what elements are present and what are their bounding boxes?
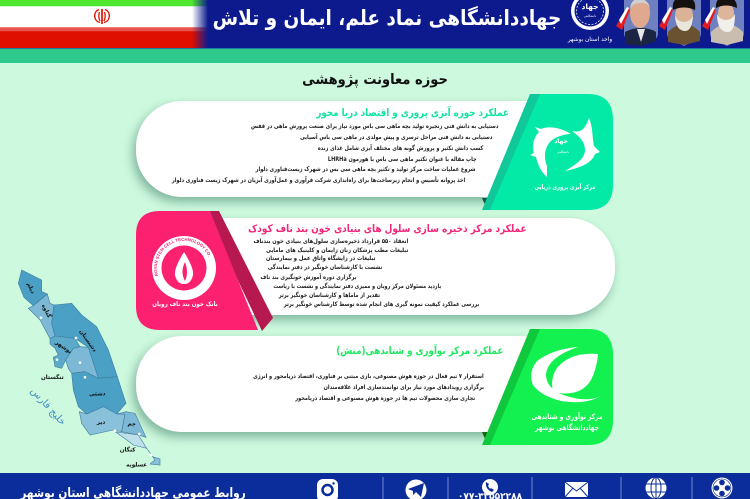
panel 3 tab label: جهاددانشگاهی بوشهر: [535, 423, 599, 432]
page heading: حوزه معاونت پژوهشی: [302, 72, 448, 88]
panel: innovation: [127, 329, 613, 445]
map label: dashtestan: دشتستان: [78, 329, 97, 353]
icon: two fish: [530, 118, 600, 177]
map label: jam: جم: [127, 422, 136, 428]
panel 1 text: [172, 123, 498, 184]
icon: flag emblem: [94, 8, 110, 24]
panel 2 text: نشست با کارشناسان خونگیر در دفتر نمایندگی: [268, 264, 382, 271]
map label: ganaveh: گناوه: [40, 303, 54, 320]
panel 2 text: تقدیر از ماماها و کارشناسان خونگیر برتر: [279, 292, 380, 299]
panel: cord blood: [136, 211, 618, 418]
logo: jahad daneshgahi: واحد استان بوشهر: [568, 37, 612, 43]
panel 1 tab label: مرکز آبزی پروری دریایی: [535, 184, 595, 191]
icon: telegram: [406, 480, 426, 499]
portraits: [616, 0, 744, 46]
map label: kangan: کنگان: [120, 445, 136, 453]
panel 2 white card: [218, 218, 615, 315]
panel 3 heading: عملکرد مرکز نوآوری و شتابدهی(منش): [336, 345, 503, 357]
panel 3 text: برگزاری رویدادهای مورد نیاز برای توانمندسازی افراد علاقه‌مندان: [324, 384, 484, 391]
panel 1 heading: عملکرد حوزه آبزی پروری و اقتصاد دریا محور: [317, 107, 509, 119]
portrait: leader: [659, 0, 701, 46]
panel 3 text: استقرار ۷ تیم فعال در حوزه هوش مصنوعی، بازی مبتنی بر فناوری، اقتصاد دریامحور و انرژی: [253, 373, 484, 380]
panel 3 white card: [136, 336, 530, 432]
icon: phone: [482, 479, 498, 495]
icon: leaf and swoosh: [531, 347, 601, 402]
panel 2 tab with logo: [136, 211, 273, 331]
icon: envelope: [565, 482, 588, 497]
panel 1 text: چاپ مقاله با عنوان تکثیر ماهی سی باس با هورمون LHRHa: [328, 156, 477, 163]
portrait: founder: [702, 0, 744, 46]
panel 2 text: انعقاد ۵۵۰ قرارداد ذخیره‌سازی سلول‌های بنیادی خون بندناف: [253, 238, 408, 245]
panel 1 text: کسب دانش تکثیر و پرورش گونه های مختلف آبزی شامل غذای زنده: [318, 145, 483, 152]
footer: [0, 473, 750, 499]
logo: jahad daneshgahi: دانشگاهی: [584, 14, 597, 18]
panel 1 tab with fish icon: [482, 94, 613, 210]
header title: جهاددانشگاهی نماد علم، ایمان و تلاش: [213, 6, 561, 30]
icon: globe: [646, 477, 666, 499]
map label: asaluyeh: عسلویه: [126, 463, 147, 469]
panel 2 text: تبلیغات در زایشگاه واتاق عمل و بیمارستان: [265, 255, 375, 262]
panel 3 text: [253, 373, 484, 402]
icon: instagram: [317, 479, 338, 499]
panel 3 tab label: مرکز نوآوری و شتابدهی: [531, 412, 603, 421]
panel 1 text: دستیابی به دانش فنی مراحل ترسری و پیش مولدی در ماهی سی باس آسیایی: [300, 134, 492, 141]
panel 1 text: دستیابی به دانش فنی زنجیره تولید بچه ماهی سی باس مورد نیاز برای صنعت پرورش ماهی در قفس: [251, 123, 498, 130]
panel 1 text: اخذ پروانه تأسیس و انجام زیرساخت‌ها برای راه‌اندازی شرکت فرآوری و عمل‌آوری آبزیان در شهرک زیست فناوری دلوار: [172, 177, 465, 184]
panel 1 white card: [136, 101, 530, 197]
panel 1 text: شروع عملیات ساخت مرکز تولید و تکثیر بچه ماهی سی بس در شهرک زیست‌فناوری دلوار: [255, 166, 475, 173]
footer icons: [317, 477, 732, 499]
icon: two fish: جهاد: [554, 138, 568, 145]
map label: tangestan: تنگستان: [41, 373, 64, 381]
panel 2 text: تبلیغات مطب پزشکان زنان زایمان و کلینیک های مامایی: [266, 247, 408, 254]
map label: deyr: دیر: [96, 420, 105, 426]
portrait: president: [616, 0, 658, 46]
map label: bushehr: بوشهر: [53, 339, 73, 355]
panel 2 text: بررسی عملکرد کیفیت نمونه گیری های انجام شده توسط کارشناس خونگیر برتر: [284, 301, 479, 308]
panel 2 text: [253, 238, 479, 308]
panel 2 tab label: بانک خون بند ناف رویان: [152, 301, 218, 308]
logo: jahad daneshgahi: [568, 0, 612, 43]
header: flag: [0, 0, 215, 48]
green band: [0, 48, 750, 63]
icon: royan logo: ROYAN STEM CELL TECHNOLOGY CO.: [154, 238, 210, 276]
panel 3 tab with leaf icon: [482, 329, 613, 445]
map: bushehr province: [18, 270, 160, 469]
map label: persian gulf: خلیج فارس: [28, 386, 68, 428]
panel 2 text: بازدید مسئولان مرکز رویان و ممیزی دفتر نمایندگی و نشست با ریاست: [273, 283, 441, 290]
map label: dashti: دشتی: [89, 392, 106, 398]
map label: deylam: دیلم: [25, 282, 35, 295]
icon: royan logo: [152, 236, 216, 300]
icon: film reel: [712, 478, 732, 498]
panel 3 text: تجاری سازی محصولات تیم ها در حوزه هوش مصنوعی و اقتصاد دریامحور: [295, 395, 475, 402]
panel: aquaculture: [127, 94, 613, 210]
panel 2 text: برگزاری دوره آموزش خونگیری بند ناف: [260, 274, 356, 281]
panel 3 tab label: [531, 412, 603, 432]
logo: jahad daneshgahi: جهاد: [581, 2, 599, 11]
icon: two fish: دانشگاهی: [557, 150, 570, 154]
panel 2 heading: عملکرد مرکز ذخیره سازی سلول های بنیادی خون بند ناف کودک: [249, 223, 527, 235]
header: blue title band: [192, 0, 750, 48]
